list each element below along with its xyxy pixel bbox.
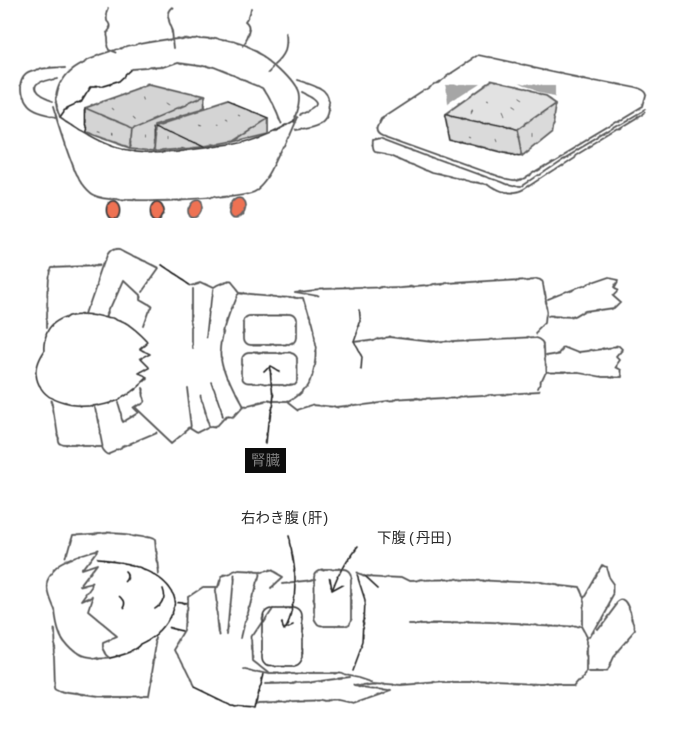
panel: person lying face up with compresses on liver and lower abdomen bbox=[46, 533, 635, 707]
icon: pot body bbox=[53, 37, 299, 200]
icon: steam lines bbox=[105, 8, 288, 71]
arrow: to kidney compress bbox=[264, 366, 279, 443]
icon: kidney compress upper bbox=[244, 315, 296, 345]
icon: arms bbox=[88, 249, 157, 453]
icon: tofu block bbox=[445, 83, 557, 155]
icon: folded cloth bbox=[373, 55, 645, 193]
icon: shirt and torso bbox=[135, 265, 242, 443]
arrow: to liver compress bbox=[282, 536, 295, 627]
icon: pillow bbox=[47, 265, 102, 446]
arrow: to lower abdomen compress bbox=[330, 547, 357, 592]
panel: tofu on folded cloth bbox=[373, 55, 645, 193]
label: kidneys bbox=[245, 448, 286, 473]
icon: pillow bbox=[53, 533, 158, 697]
icon: head and hair bbox=[46, 552, 175, 659]
panel: person lying face down with compress on kidneys bbox=[36, 249, 623, 453]
label: right side abdomen (liver): 右わき腹(肝) bbox=[241, 510, 328, 527]
icon: tofu block left bbox=[85, 85, 203, 150]
icon: lower arm and hand bbox=[243, 668, 390, 703]
icon: neck bbox=[172, 603, 188, 631]
icon: trousers bbox=[288, 278, 548, 410]
icon: shirt and torso bbox=[175, 570, 315, 707]
icon: stove flames bbox=[106, 195, 248, 220]
icon: lower abdomen compress bbox=[314, 570, 351, 627]
icon: tofu block right bbox=[155, 102, 267, 150]
panel: tofu boiling in a pot bbox=[20, 8, 330, 200]
icon: gray shadow behind tofu bbox=[445, 85, 556, 105]
label: lower abdomen (dantian): 下腹(丹田) bbox=[377, 530, 452, 547]
icon: pot handles bbox=[20, 67, 330, 130]
icon: feet bbox=[546, 278, 623, 377]
icon: front rim of pot bbox=[60, 117, 293, 152]
icon: lower back band bbox=[221, 293, 316, 408]
icon: kidney compress lower bbox=[242, 353, 297, 385]
icon: feet bbox=[583, 565, 635, 670]
icon: back of head bbox=[36, 313, 150, 406]
icon: liver compress bbox=[262, 607, 302, 666]
label: kidneys: 腎臓 bbox=[251, 452, 280, 470]
icon: trousers bbox=[353, 573, 588, 685]
